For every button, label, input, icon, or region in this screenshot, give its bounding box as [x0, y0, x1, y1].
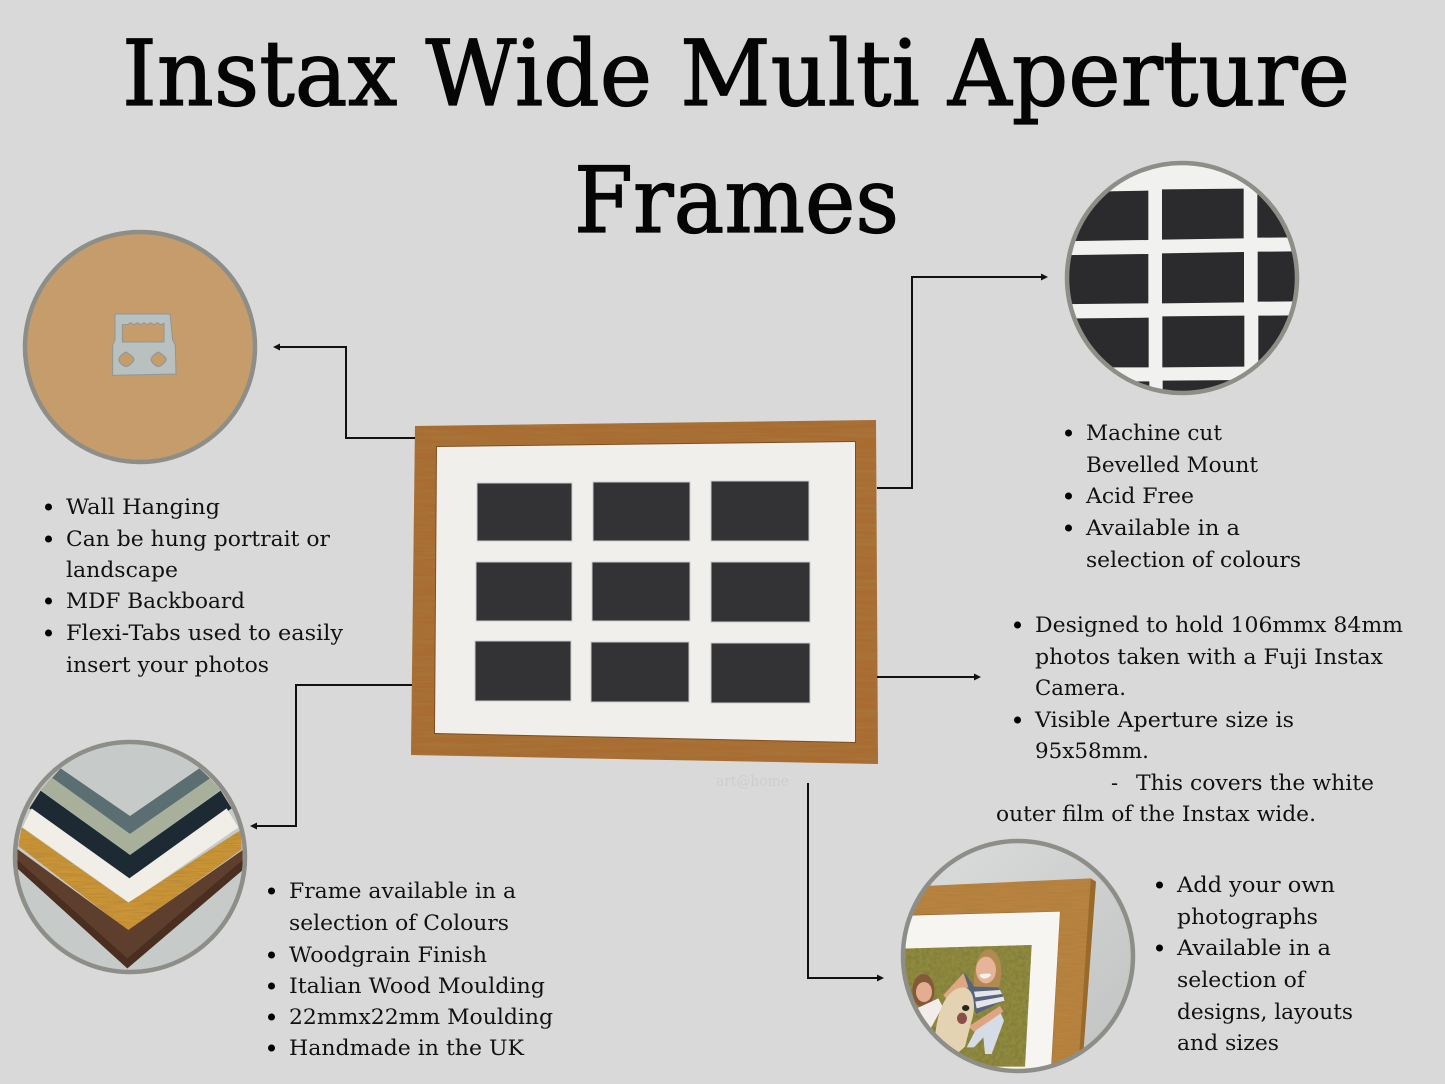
moulding: gold	[18, 827, 242, 931]
frame corner	[913, 878, 1091, 1064]
dog	[935, 987, 974, 1054]
text block: hanging features: insert your photos	[66, 653, 269, 677]
text block: hanging features	[45, 495, 343, 677]
moulding: walnut brown	[17, 849, 243, 968]
text block: personalise features: photographs	[1177, 905, 1318, 929]
text block: hanging features: Can be hung portrait or	[66, 527, 331, 551]
arrow: frame to moulding circle	[250, 685, 412, 830]
watermark: art@home	[716, 772, 789, 790]
aperture grid	[475, 481, 810, 703]
text block: hanging features: MDF Backboard	[66, 589, 245, 613]
text block: personalise features: Available in a	[1176, 936, 1331, 960]
circle: moulding colour samples	[10, 738, 250, 978]
arrow: frame to mount circle	[877, 274, 1048, 488]
text block: mount features: Acid Free	[1085, 484, 1194, 508]
mount	[912, 911, 1060, 1064]
text block: mount features	[1065, 421, 1301, 572]
title: Instax Wide Multi Aperture	[122, 22, 1350, 127]
text block: hanging features: Wall Hanging	[66, 495, 220, 519]
text block: photo size notes: This covers the white	[1136, 771, 1374, 795]
text block: moulding features: Handmade in the UK	[289, 1036, 524, 1060]
text block: mount features: Available in a	[1085, 516, 1240, 540]
text block: photo size notes: Visible Aperture size is	[1034, 708, 1294, 732]
text block: mount features: Machine cut	[1086, 421, 1223, 445]
circle: MDF backboard with hanger	[25, 232, 255, 462]
text block: photo size notes: 95x58mm.	[1035, 739, 1149, 763]
moulding: sage	[41, 777, 221, 855]
text block: personalise features: and sizes	[1177, 1031, 1279, 1055]
text block: personalise features: Add your own	[1176, 873, 1335, 897]
text block: photo size notes	[996, 613, 1403, 826]
text block: hanging features: Flexi-Tabs used to easily	[66, 621, 343, 645]
text block: moulding features	[268, 879, 553, 1060]
text block: photo size notes: Designed to hold 106mmx 84mm	[1035, 613, 1403, 637]
frame moulding	[411, 420, 878, 764]
text block: photo size notes: photos taken with a Fuji Instax	[1035, 645, 1383, 669]
icon: sawtooth hanger	[113, 314, 176, 375]
text block: moulding features: Italian Wood Moulding	[289, 974, 545, 998]
family photo	[900, 945, 1032, 1067]
circle: lifestyle frame corner with family photo	[893, 838, 1138, 1076]
text block: personalise features: designs, layouts	[1177, 1000, 1353, 1024]
arrow: frame to size notes	[877, 674, 981, 680]
text block: mount features: Bevelled Mount	[1086, 453, 1259, 477]
inner frame shadow line	[434, 441, 856, 743]
text block: photo size notes: -	[1111, 771, 1118, 795]
text block: moulding features: selection of Colours	[289, 911, 509, 935]
moulding: navy black	[29, 791, 232, 878]
text block: hanging features: landscape	[66, 558, 178, 582]
text block: moulding features: Woodgrain Finish	[289, 943, 487, 967]
text block: photo size notes: Camera.	[1035, 676, 1126, 700]
circle: bevelled mount close-up	[1064, 160, 1300, 396]
text block: photo size notes: outer film of the Instax wide.	[996, 802, 1316, 826]
arrow: frame to wall hanging circle	[273, 344, 415, 438]
text block: personalise features	[1156, 873, 1353, 1055]
white mount	[435, 442, 855, 742]
title: Frames	[574, 149, 899, 254]
central product photo: wooden frame with nine apertures	[411, 420, 878, 764]
title	[122, 22, 1350, 254]
woman	[974, 949, 1002, 988]
text block: personalise features: selection of	[1177, 968, 1307, 992]
girl	[912, 974, 934, 1007]
text block: moulding features: Frame available in a	[289, 879, 516, 903]
moulding: grey blue	[52, 768, 210, 834]
arrow: frame to lifestyle circle	[808, 783, 884, 982]
text block: moulding features: 22mmx22mm Moulding	[289, 1005, 553, 1029]
text block: mount features: selection of colours	[1086, 548, 1301, 572]
moulding: white	[23, 808, 238, 903]
